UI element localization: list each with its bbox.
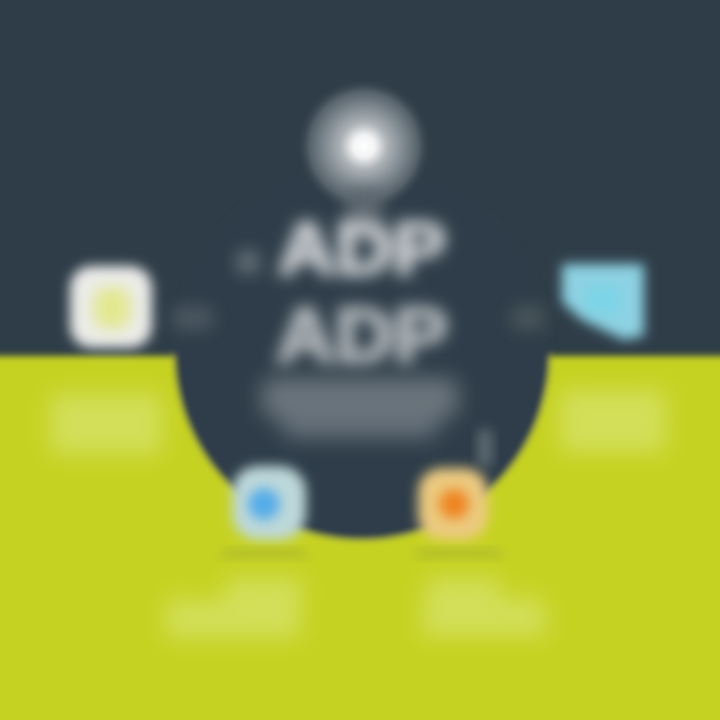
icon: lower left node, blue in pale tile xyxy=(232,466,306,540)
text block: description under heading: Description text xyxy=(275,376,445,396)
label shadows under lower nodes xyxy=(222,549,502,558)
text block: lower left label: Label xyxy=(172,586,292,616)
text block: left label: Label xyxy=(57,401,153,431)
text block: right label xyxy=(557,390,666,452)
connector: right node to centre xyxy=(510,305,546,331)
text block: lower right label xyxy=(422,578,546,636)
icon: right node, sky blue chat tile xyxy=(562,264,644,340)
icon: left node, pale lime in white tile xyxy=(70,266,152,348)
connector: left node to centre xyxy=(172,305,214,331)
text block: description under heading xyxy=(262,376,458,438)
connector: orange node to centre xyxy=(478,430,492,466)
background: lime lower field with circular cutout xyxy=(0,164,720,720)
text block: lower right label: Label xyxy=(425,586,535,616)
text block: left label xyxy=(50,394,162,454)
icon: lower right node, orange in peach tile xyxy=(418,468,488,540)
text block: right label: Label xyxy=(557,401,653,431)
text block: lower left label xyxy=(166,578,302,638)
heading: first line: ADP xyxy=(278,207,446,290)
heading: second line: ADP xyxy=(276,291,448,379)
icon: top glowing circle xyxy=(296,78,432,214)
small mark left of heading xyxy=(236,250,260,274)
connector: top circle to heading xyxy=(346,190,382,240)
